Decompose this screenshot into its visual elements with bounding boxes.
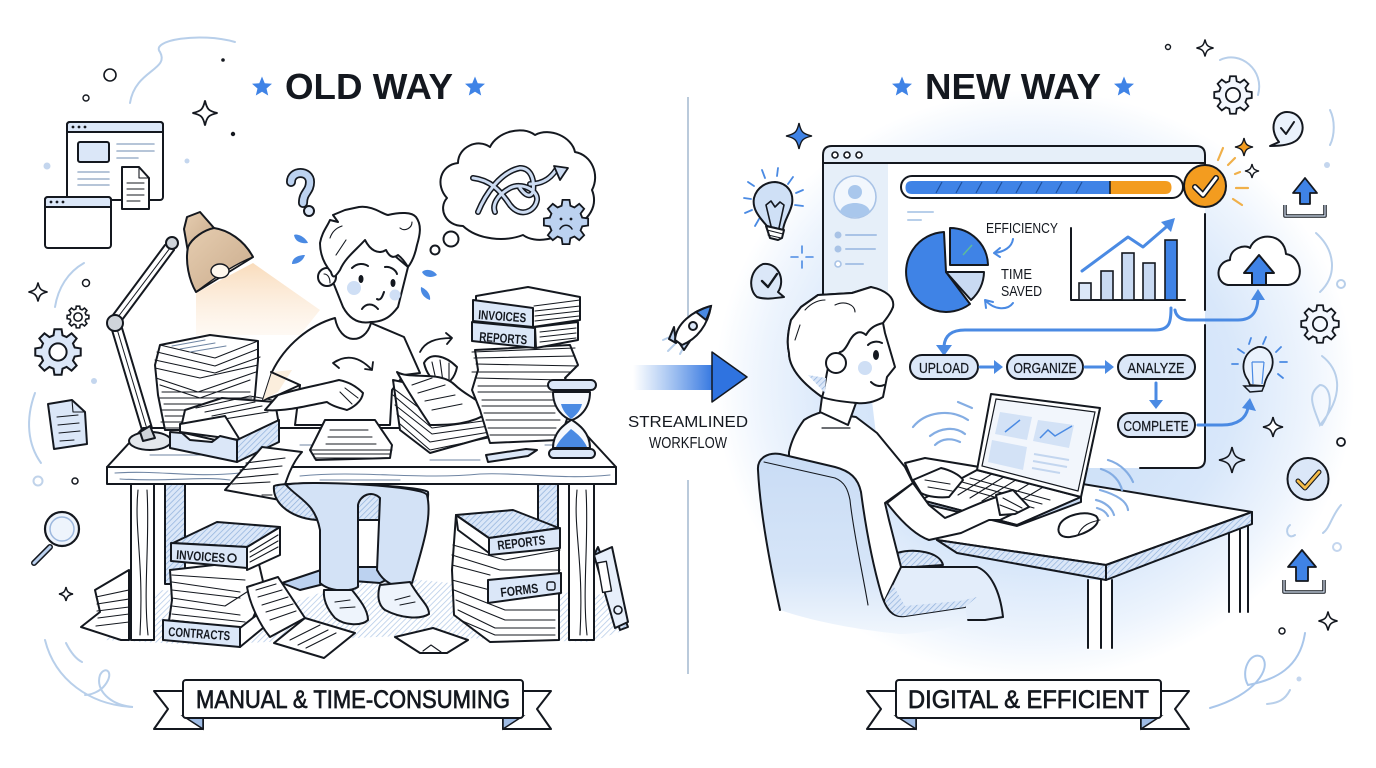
- icon: speech check bubbles: [751, 112, 1303, 299]
- illustration: left book pile under desk: [163, 522, 280, 647]
- icon: rocket: [663, 306, 711, 354]
- illustration: desk: [107, 428, 616, 640]
- illustration: left book pile under desk: CONTRACTS: [168, 624, 231, 643]
- illustration: right book stack: [472, 287, 580, 443]
- illustration: hanging paper: [225, 447, 302, 500]
- illustration: left book pile under desk: INVOICES: [176, 547, 226, 565]
- icon: check circle: [1288, 458, 1328, 500]
- icon: cloud upload: [1218, 237, 1300, 285]
- panel: old way decorations: [28, 37, 235, 707]
- workflow: complete step: COMPLETE: [1124, 418, 1188, 435]
- arrow: streamlined workflow: [633, 352, 747, 402]
- illustration: left paper stack: [155, 335, 260, 430]
- pie chart labels: SAVED: [1001, 283, 1042, 300]
- illustration: right book stack: INVOICES: [478, 307, 527, 325]
- icon: question mark: [291, 173, 314, 216]
- icon: lightbulb left: [744, 168, 803, 240]
- icon: document: [48, 400, 87, 449]
- workflow: organize step: [1007, 355, 1083, 379]
- workflow: complete step: [1118, 413, 1195, 437]
- illustration: right book pile under desk: REPORTS: [497, 532, 546, 553]
- illustration: right book pile under desk: [452, 510, 628, 642]
- illustration: new desk: [905, 458, 1252, 650]
- panel: browser window: [823, 146, 1205, 468]
- arrow: organize to analyze: [1085, 360, 1114, 374]
- icon: gears left: [35, 306, 89, 375]
- illustration: person at laptop: [758, 287, 1029, 634]
- icon: lightbulb right: [1232, 337, 1287, 392]
- illustration: floor shadow and clutter under desk: [81, 570, 625, 645]
- banner: manual & time-consuming: [154, 680, 551, 729]
- arrow: analyze to complete: [1149, 383, 1163, 409]
- illustration: center paper pile: [310, 372, 490, 460]
- illustration: right book stack: REPORTS: [479, 329, 528, 347]
- workflow: analyze step: ANALYZE: [1128, 360, 1184, 377]
- pie chart: [906, 228, 988, 312]
- arrow: upload to organize: [980, 360, 1003, 374]
- pie chart labels: TIME: [1001, 266, 1032, 283]
- icon: upload tray top: [1285, 178, 1325, 216]
- icon: browser windows: [45, 122, 163, 248]
- illustration: stressed person at old desk: [263, 207, 457, 624]
- workflow: analyze step: [1118, 355, 1195, 379]
- workflow: upload step: UPLOAD: [919, 360, 969, 377]
- icon: thought cloud with knot: [430, 130, 595, 254]
- icon: magnifier: [34, 512, 79, 563]
- illustration: desk lamp: [107, 212, 320, 450]
- workflow: organize step: ORGANIZE: [1014, 360, 1076, 377]
- illustration: right book pile under desk: FORMS: [500, 580, 539, 600]
- icon: gears right: [1214, 76, 1339, 343]
- banner: manual & time-consuming: MANUAL & TIME-CONSUMING: [196, 686, 510, 714]
- icon: sweat drops: [292, 235, 437, 300]
- icon: upload tray bottom: [1284, 550, 1324, 592]
- icon: pen: [486, 449, 537, 462]
- icon: mouse and wifi waves: [913, 402, 1133, 537]
- workflow connectors: [936, 289, 1265, 356]
- illustration: laptop: [921, 394, 1100, 526]
- pie chart labels: EFFICIENCY: [986, 220, 1058, 237]
- avatar: [834, 176, 876, 218]
- banner: digital & efficient: [867, 680, 1189, 729]
- illustration: loose papers on floor: [247, 577, 468, 658]
- icon: right-side decorations: [786, 40, 1345, 708]
- title: old way: OLD WAY: [285, 66, 453, 107]
- arrow: complete to bulb: [1198, 398, 1256, 425]
- banner: digital & efficient: DIGITAL & EFFICIENT: [908, 686, 1149, 714]
- panel: new way glow background: [715, 90, 1355, 680]
- icon: orange check badge: [1184, 138, 1259, 207]
- label: streamlined workflow: WORKFLOW: [649, 435, 728, 452]
- workflow: upload step: [910, 355, 978, 379]
- icon: hourglass: [548, 380, 596, 458]
- progress bar: [901, 176, 1183, 198]
- label: streamlined workflow: [628, 414, 748, 452]
- illustration: file box: [170, 396, 279, 462]
- pie chart labels: [985, 220, 1058, 308]
- label: streamlined workflow: STREAMLINED: [628, 414, 748, 431]
- bar chart: [1071, 218, 1185, 300]
- title: new way: NEW WAY: [925, 66, 1101, 107]
